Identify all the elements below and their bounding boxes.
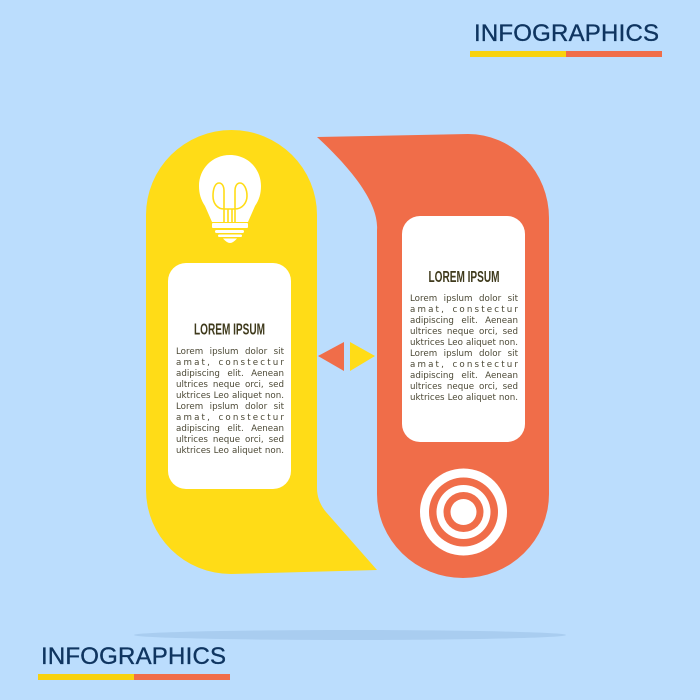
text block: right card: adipiscing elit. Aenean [410, 371, 518, 381]
text block: right card: ultrices neque orci, sed [410, 327, 518, 337]
text block: left card: amat, constectur [176, 358, 286, 368]
text block: right card: uktrices Leo aliquet non. [410, 393, 518, 403]
orange panel white card [402, 216, 525, 442]
panel: yellow speech shape [146, 130, 377, 574]
text block: left card: uktrices Leo aliquet non. [176, 446, 284, 456]
yellow panel white card [168, 263, 291, 489]
text block: left card: uktrices Leo aliquet non. [176, 391, 284, 401]
text block: right card: ultrices neque orci, sed [410, 382, 518, 392]
text block: right card: amat, constectur [410, 360, 520, 370]
title bar: bottom [38, 674, 230, 680]
text block: left card: ultrices neque orci, sed [176, 435, 284, 445]
text block: right card: amat, constectur [410, 305, 520, 315]
arrow: left orange triangle [318, 342, 344, 371]
title bar: top [470, 51, 662, 57]
text block: left card: ultrices neque orci, sed [176, 380, 284, 390]
text block: left card [176, 347, 286, 456]
text block: right card [410, 294, 520, 403]
heading: left card: LOREM IPSUM [194, 322, 265, 338]
icon: light bulb [199, 155, 261, 243]
text block: left card: adipiscing elit. Aenean [176, 424, 284, 434]
heading: right card: LOREM IPSUM [428, 269, 500, 286]
text block: right card: Lorem ipslum dolor sit [410, 349, 518, 359]
text block: left card: Lorem ipslum dolor sit [176, 402, 284, 412]
title: top right: INFOGRAPHICS [474, 20, 659, 47]
text block: left card: Lorem ipslum dolor sit [176, 347, 284, 357]
text block: right card: uktrices Leo aliquet non. [410, 338, 518, 348]
panel: orange speech shape [317, 134, 549, 578]
icon: target [420, 468, 507, 556]
text block: right card: adipiscing elit. Aenean [410, 316, 518, 326]
arrow: right yellow triangle [350, 342, 375, 371]
text block: left card: adipiscing elit. Aenean [176, 369, 284, 379]
ground shadow [134, 630, 566, 640]
text block: right card: Lorem ipslum dolor sit [410, 294, 518, 304]
text block: left card: amat, constectur [176, 413, 286, 423]
title: bottom left: INFOGRAPHICS [41, 643, 226, 670]
